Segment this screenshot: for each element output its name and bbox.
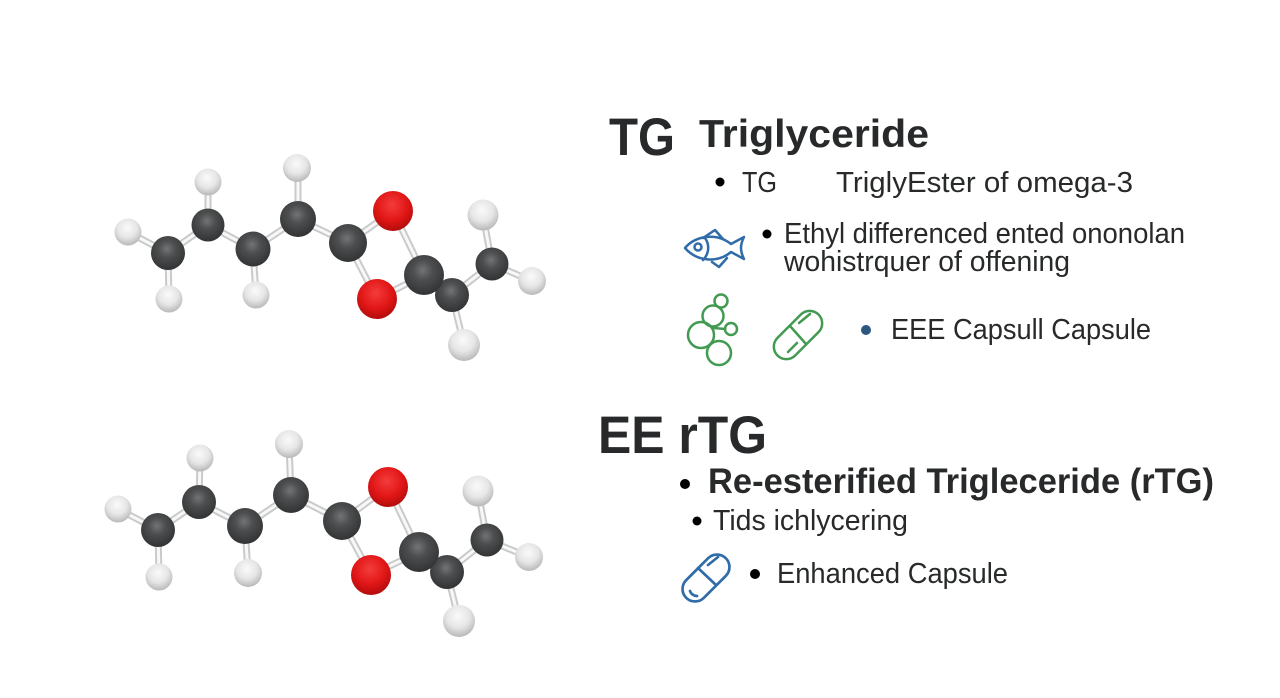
carbon atoms [141, 477, 504, 589]
hydrogen atoms [114, 154, 546, 361]
heading: EE rTG: EE rTG [598, 406, 767, 465]
bullet: TG ester of omega-3: TG [742, 167, 777, 199]
molecule: rTG ball-and-stick model [104, 430, 543, 637]
molecule: TG ball-and-stick model [114, 154, 546, 361]
oxygen atoms [351, 467, 408, 595]
carbon atoms [151, 201, 508, 312]
bonds [118, 444, 529, 621]
oxygen atoms [357, 191, 413, 319]
bullet: tids ichlycering: Tids ichlycering [713, 505, 908, 537]
bullet: re-esterified triglyceride: Re-esterified Trigleceride (rTG) [708, 462, 1214, 501]
icon: fish [685, 230, 744, 267]
heading: Triglyceride: Triglyceride [699, 113, 929, 156]
bullet: ethyl description [762, 218, 1185, 278]
bullet: EEE capsule: EEE Capsull Capsule [891, 314, 1151, 346]
bullet: ethyl description: Ethyl differenced ented ononolan [784, 218, 1185, 250]
bullet: TG ester of omega-3: TriglyEster of omega-3 [836, 167, 1133, 199]
bullet: ethyl description: wohistrquer of offening [783, 246, 1070, 278]
icon: green bubbles [688, 294, 737, 365]
icon: blue capsule [677, 549, 735, 607]
heading: TG: TG [609, 108, 675, 167]
hydrogen atoms [104, 430, 543, 637]
bullet: enhanced capsule: Enhanced Capsule [777, 558, 1008, 590]
icon: green capsule [769, 306, 827, 364]
bonds [128, 168, 532, 345]
